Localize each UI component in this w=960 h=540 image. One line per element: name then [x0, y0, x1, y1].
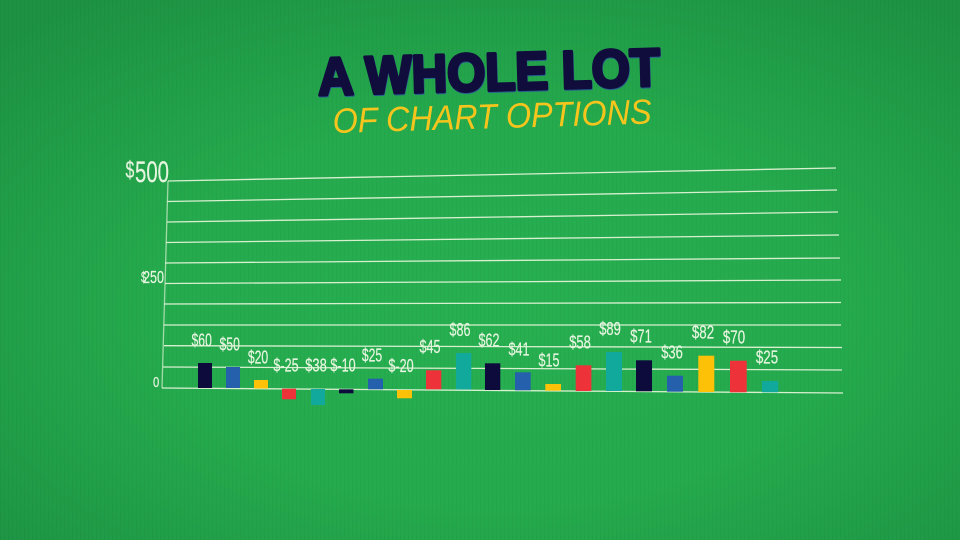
axis labels: 250: [143, 268, 164, 288]
value labels: $71: [630, 328, 652, 347]
axis labels: 0: [153, 373, 159, 390]
value labels: $60: [192, 331, 212, 351]
value labels: $25: [362, 346, 382, 366]
value labels: $-20: [388, 357, 414, 377]
value labels: $62: [479, 331, 499, 351]
value labels: $41: [509, 340, 530, 360]
value labels: $15: [539, 351, 560, 371]
heading shadow: A WHOLE LOT: [318, 39, 661, 108]
value labels: $-10: [330, 356, 356, 376]
value labels: $50: [220, 335, 240, 355]
value labels: $-25: [273, 356, 299, 376]
value labels: $58: [569, 333, 591, 353]
subheading: of chart options: OF CHART OPTIONS: [332, 93, 652, 141]
heading: a whole lot: A WHOLE LOT: [317, 38, 661, 107]
title: [317, 38, 661, 141]
axis labels: 500: [135, 156, 169, 189]
axis labels: $: [126, 158, 134, 184]
value labels: $70: [723, 327, 745, 348]
grid lines: [162, 168, 843, 393]
value labels: $45: [420, 338, 441, 358]
chart: bar chart on tilted grid: [126, 156, 843, 405]
value labels: [192, 320, 778, 377]
value labels: $25: [756, 347, 778, 368]
value labels: $82: [692, 322, 714, 343]
bars: [198, 352, 778, 405]
value labels: $38: [305, 357, 327, 376]
value labels: $86: [450, 321, 471, 341]
value labels: $36: [661, 343, 683, 363]
value labels: $20: [248, 348, 268, 368]
axis labels: [126, 156, 169, 390]
value labels: $89: [599, 320, 621, 340]
axis labels: $: [141, 269, 146, 286]
